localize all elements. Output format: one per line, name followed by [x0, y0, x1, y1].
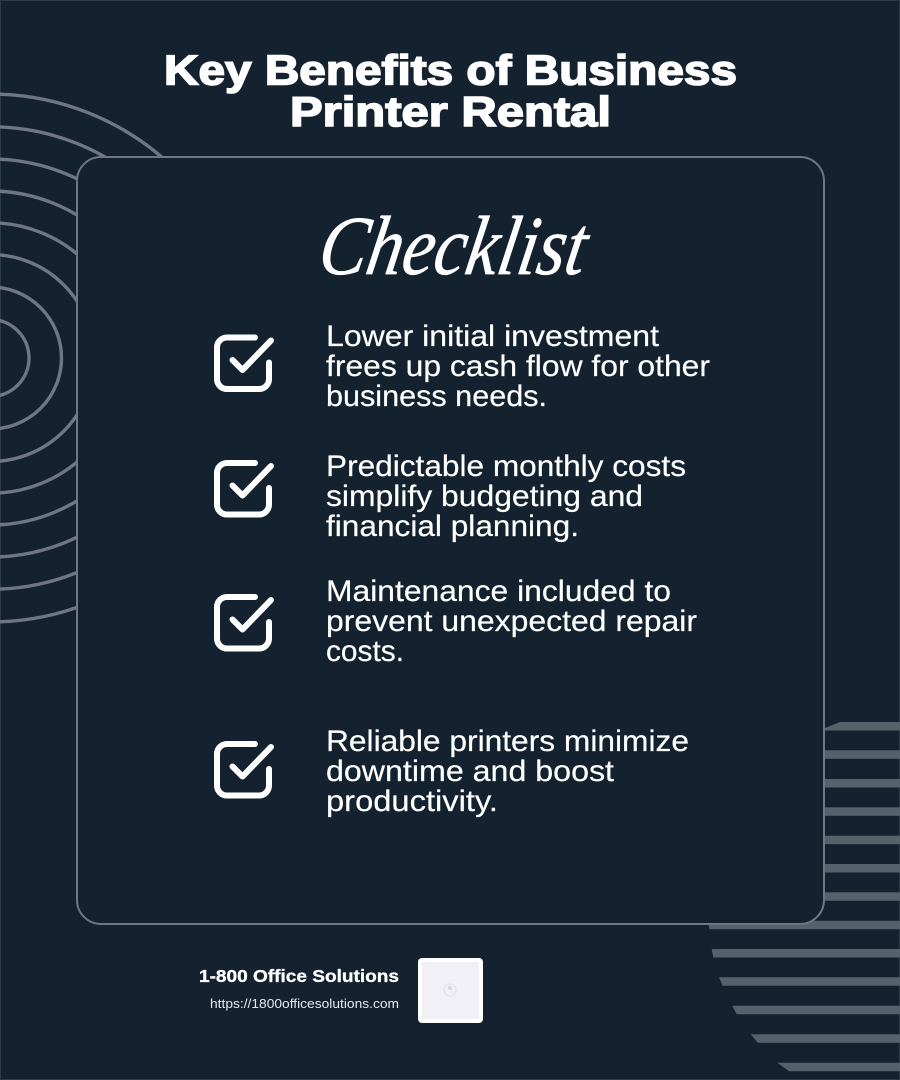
- text: item 1: Lower initial investment: [326, 320, 659, 353]
- text: item 4: [326, 725, 689, 818]
- text: item 1: frees up cash flow for other: [326, 350, 710, 383]
- icon: checkbox 3: [217, 597, 271, 648]
- text: item 4: Reliable printers minimize: [326, 725, 689, 758]
- decorative stripes: [708, 722, 900, 1071]
- footer: website URL: https://1800officesolutions.com: [210, 996, 399, 1011]
- item 2: [217, 450, 686, 543]
- text: item 1: business needs.: [326, 380, 547, 413]
- text: item 2: financial planning.: [326, 510, 579, 543]
- icon: checkbox 4: [217, 744, 271, 796]
- text: item 4: downtime and boost: [326, 755, 614, 788]
- text: item 2: Predictable monthly costs: [326, 450, 686, 483]
- text: item 3: prevent unexpected repair: [326, 605, 697, 638]
- footer: company name: 1-800 Office Solutions: [199, 966, 399, 986]
- text: item 2: simplify budgeting and: [326, 480, 643, 513]
- decorative concentric rings: [0, 94, 254, 622]
- title: Key Benefits of Business: [164, 46, 737, 94]
- logo tile: [418, 958, 483, 1023]
- item 4: [217, 725, 689, 818]
- title: Printer Rental: [290, 88, 611, 135]
- item 1: [217, 320, 710, 413]
- text: item 3: costs.: [326, 635, 404, 668]
- heading: Checklist: Checklist: [313, 201, 597, 293]
- text: item 1: [326, 320, 710, 413]
- item 3: [217, 575, 697, 668]
- text: item 3: Maintenance included to: [326, 575, 671, 608]
- icon: checkbox 2: [217, 463, 271, 514]
- text: item 4: productivity.: [326, 785, 498, 818]
- icon: checkbox 1: [217, 338, 271, 389]
- panel: checklist: [77, 157, 824, 924]
- text: item 3: [326, 575, 697, 668]
- text: item 2: [326, 450, 686, 543]
- title: [164, 46, 737, 135]
